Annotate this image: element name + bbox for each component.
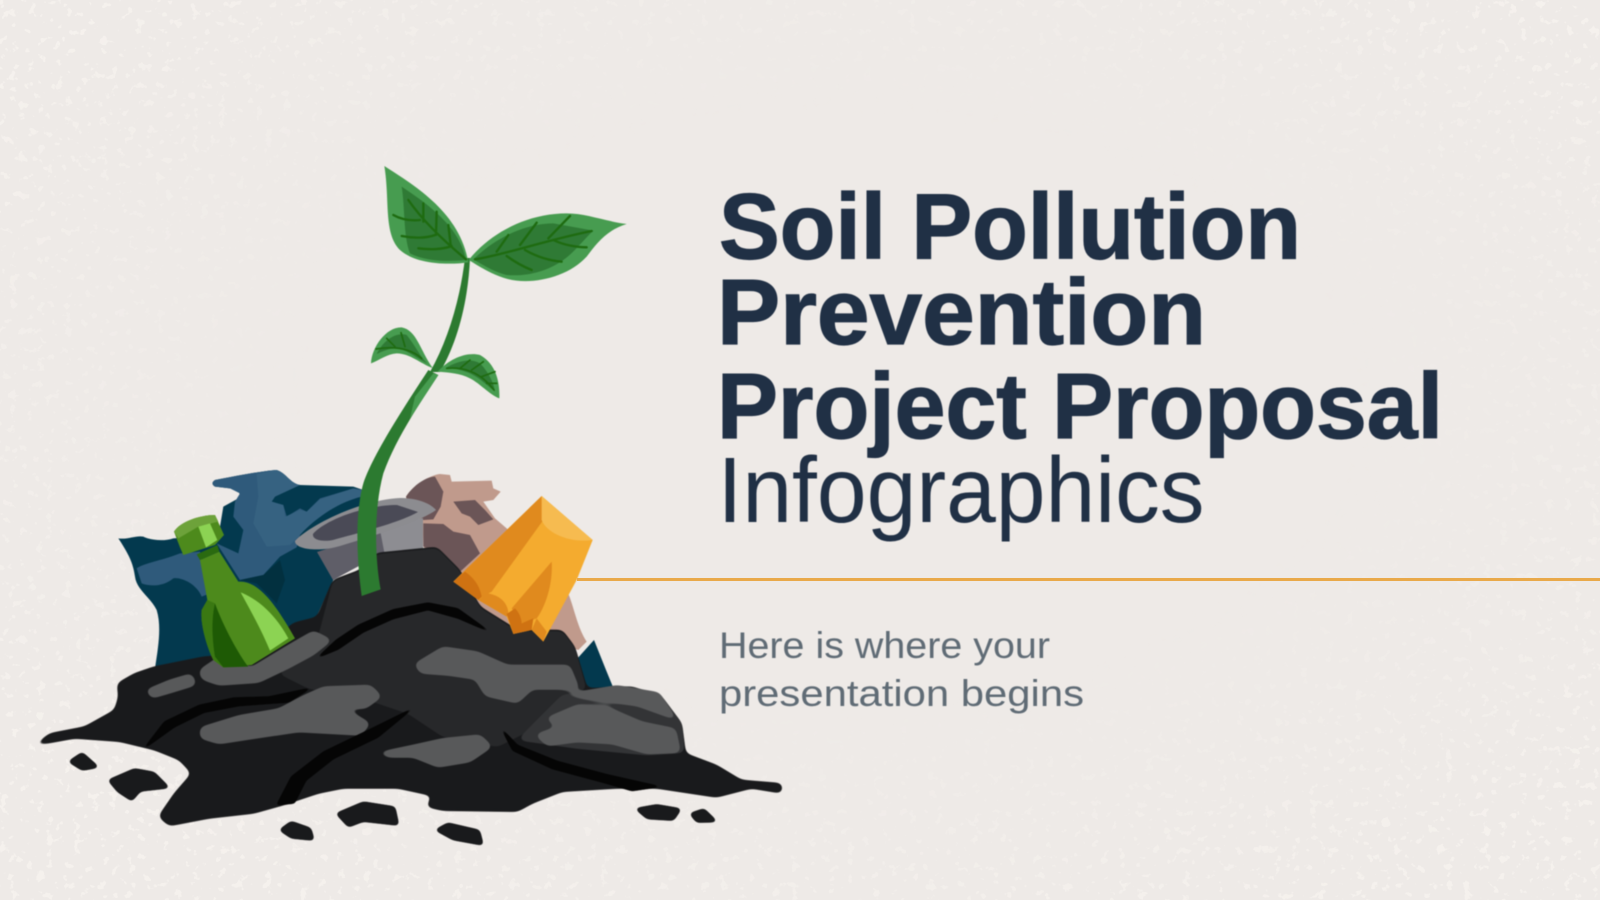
seedling: [357, 166, 627, 596]
rose cloth: [406, 474, 587, 650]
soil crumbs: [68, 752, 718, 846]
plastic cup: [295, 498, 436, 580]
title line 2: Prevention: [717, 260, 1206, 364]
subtitle line 2: presentation begins: [719, 673, 1084, 714]
illustration: polluted soil heap with seedling: [32, 166, 782, 846]
orange crumpled piece: [453, 496, 593, 642]
title line 3: Project Proposal: [717, 354, 1443, 458]
blue cloth: [118, 470, 363, 668]
leaves: [371, 166, 627, 398]
leaf: small left: [371, 327, 433, 368]
leaf: upper left: [384, 166, 468, 264]
title line 4: Infographics: [718, 438, 1204, 542]
right mound shade: [518, 688, 684, 755]
dark blue fabric corner: [576, 640, 615, 700]
soil cracks: [142, 603, 662, 805]
divider line: [577, 578, 1600, 581]
soil details: [68, 603, 718, 846]
title: [717, 174, 1443, 542]
leaf: small right: [438, 354, 499, 398]
bottle: [174, 515, 295, 667]
gray soil patches: [145, 631, 681, 767]
upper mound shade: [279, 549, 586, 747]
title line 1: Soil Pollution: [719, 174, 1301, 278]
soil heap: [32, 547, 782, 826]
subtitle: [719, 625, 1084, 714]
soil base: [32, 547, 782, 826]
stem: [357, 258, 470, 596]
leaf: upper right: [469, 213, 627, 281]
subtitle line 1: Here is where your: [719, 625, 1050, 666]
